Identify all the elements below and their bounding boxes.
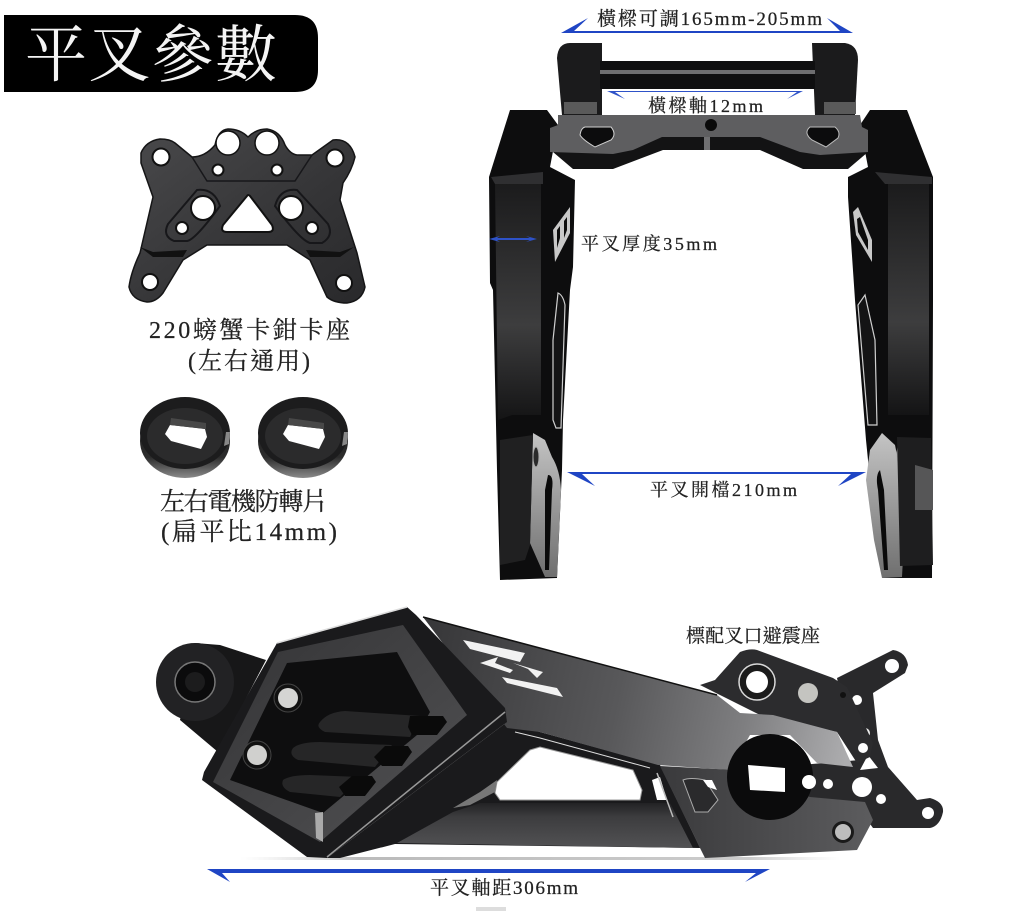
rear bracket plate <box>800 650 943 828</box>
crossbar lower shadow <box>553 130 868 169</box>
dimension: wheelbase 306mm <box>207 869 770 899</box>
dimension: wheelbase 306mm: 平叉軸距306mm <box>430 877 578 899</box>
dimension: axle 12mm <box>607 91 803 116</box>
dimension: fork thickness 35mm: 平叉厚度35mm <box>581 234 717 254</box>
washers caption <box>160 488 337 546</box>
dimension: fork opening 210mm: 平叉開檔210mm <box>650 480 797 500</box>
chain guard pentagon <box>202 607 507 858</box>
washers caption: (扁平比14mm) <box>161 518 337 546</box>
caliper mount caption: (左右通用) <box>188 348 310 375</box>
caliper mount caption <box>149 317 350 375</box>
washers caption: 左右電機防轉片 <box>160 488 327 516</box>
truss silhouette <box>327 722 705 858</box>
left arm <box>489 110 575 580</box>
dimension: fork thickness 35mm <box>489 234 717 254</box>
upper bracket <box>700 649 873 763</box>
caliper mount caption: 220螃蟹卡鉗卡座 <box>149 317 350 344</box>
axle rod <box>600 61 815 89</box>
dimension: axle 12mm: 橫樑軸12mm <box>648 96 763 116</box>
faint stub at bottom <box>476 907 506 911</box>
crossbar <box>550 115 868 155</box>
axle posts <box>557 43 858 115</box>
icon: anti-rotation washers <box>140 397 348 478</box>
dimension: crossbar adjustable width <box>561 8 853 33</box>
swingarm side view <box>156 607 943 860</box>
dimension: fork opening 210mm <box>567 472 866 500</box>
right arm <box>848 110 933 578</box>
RS logo <box>463 640 563 697</box>
rear wedge and wheel bearing <box>156 643 266 752</box>
icon: caliper mount plate <box>129 129 365 303</box>
lower end block <box>660 734 873 858</box>
dimension: crossbar adjustable width: 橫樑可調165mm-205mm <box>597 8 822 30</box>
title banner: 平叉參數 <box>25 22 277 90</box>
main beam <box>423 617 853 770</box>
fork front view <box>489 43 933 580</box>
truss window <box>397 747 693 848</box>
label: standard fork damper seat: 標配叉口避震座 <box>686 625 820 647</box>
ground shadow <box>240 857 840 860</box>
